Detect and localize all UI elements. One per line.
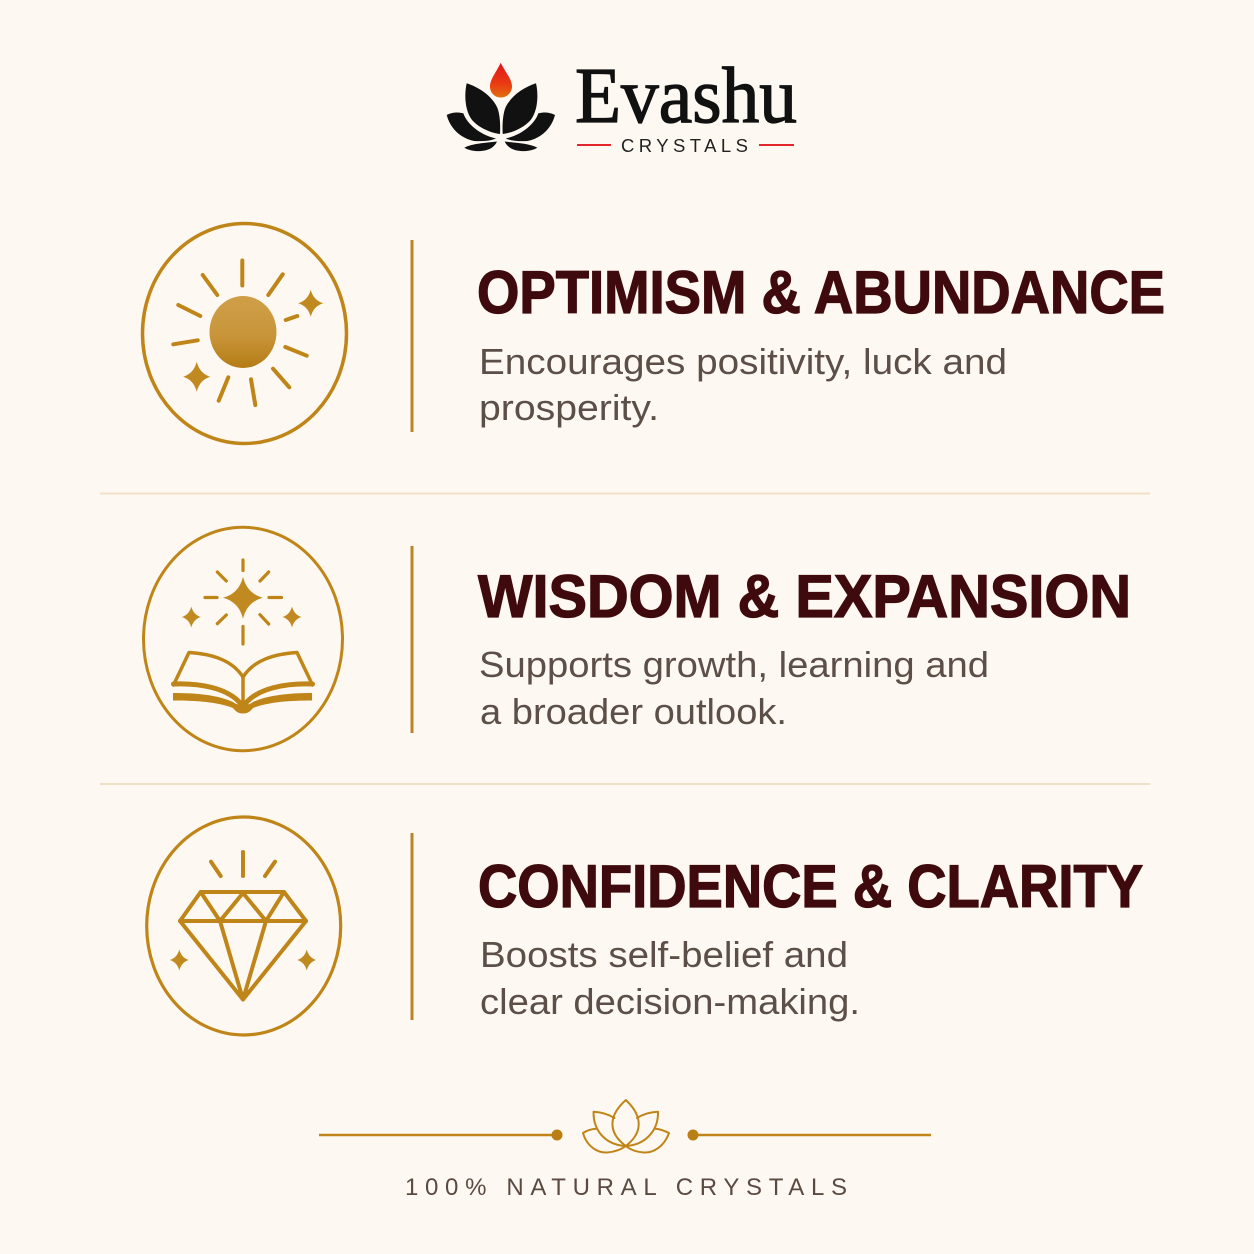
- panel: confidence and clarity: [147, 817, 1143, 1035]
- icon: open book with star: [144, 527, 342, 751]
- vertical rule: [410, 833, 414, 1020]
- vertical rule: [410, 240, 414, 432]
- logo: Evashu Crystals: [447, 53, 797, 156]
- description: Boosts self-belief and: [480, 934, 848, 975]
- icon: lotus with red drop: [447, 63, 555, 151]
- heading: WISDOM & EXPANSION: [478, 563, 1131, 630]
- icon: sun: [142, 224, 346, 444]
- sub-brand: crystals: CRYSTALS: [621, 135, 748, 156]
- icon: outline lotus: [583, 1100, 669, 1153]
- description: Encourages positivity, luck and: [479, 341, 1007, 382]
- description: a broader outlook.: [480, 691, 787, 732]
- panel: optimism and abundance: [142, 224, 1165, 444]
- icon: diamond: [147, 817, 341, 1035]
- description: [479, 341, 1007, 428]
- description: clear decision-making.: [480, 981, 860, 1022]
- description: [479, 644, 989, 732]
- description: Supports growth, learning and: [479, 644, 989, 685]
- footer caption: 100% NATURAL CRYSTALS: [405, 1174, 847, 1201]
- heading: OPTIMISM & ABUNDANCE: [477, 259, 1165, 326]
- panel: wisdom and expansion: [144, 527, 1131, 751]
- footer ornament: [319, 1100, 931, 1153]
- wordmark: Evashu: [575, 53, 797, 140]
- description: prosperity.: [479, 387, 659, 428]
- heading: CONFIDENCE & CLARITY: [478, 853, 1143, 920]
- description: [480, 934, 860, 1022]
- vertical rule: [410, 546, 414, 733]
